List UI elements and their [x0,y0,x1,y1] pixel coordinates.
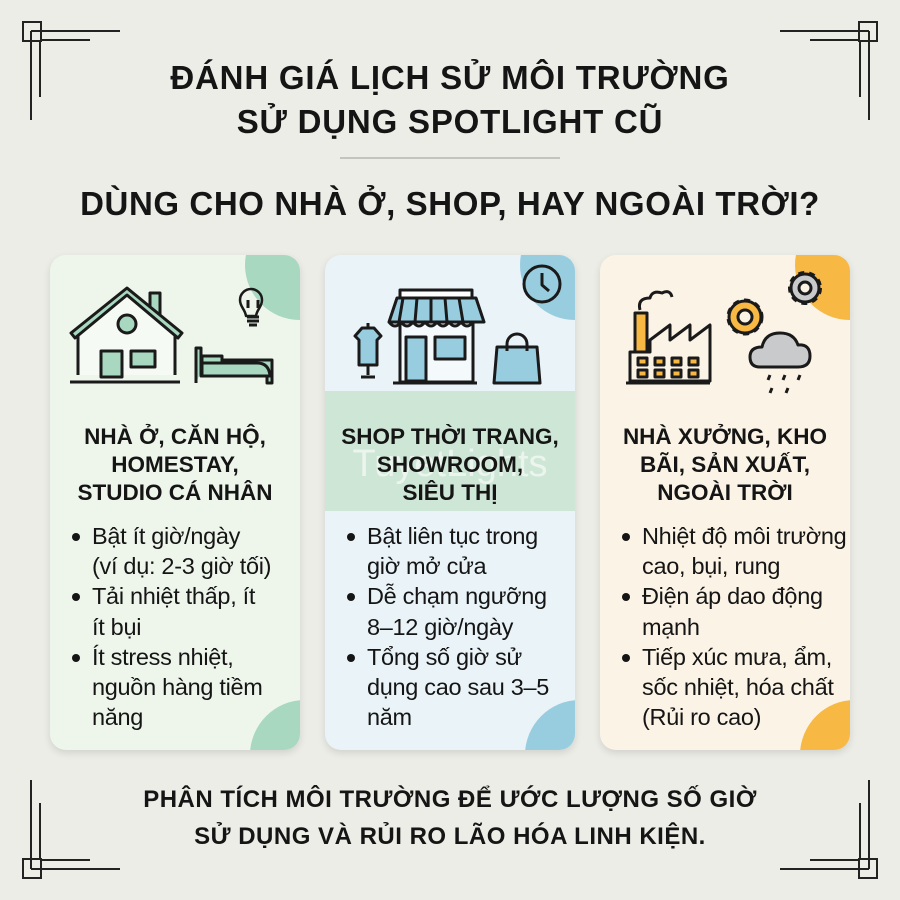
bullet list: nguồn hàng tiềm [92,674,263,700]
heading: NHÀ Ở, CĂN HỘ, [84,424,266,449]
bullet list [347,523,549,730]
footer [143,785,757,850]
bullet list: Bật ít giờ/ngày [92,523,240,549]
bullet list [72,523,271,730]
icon: factory, gears, rain cloud [626,271,822,394]
panel: industrial [600,255,850,750]
bullet list: giờ mở cửa [367,553,486,579]
icon: house, bed, bulb [69,286,274,384]
bullet list: cao, bụi, rung [642,553,780,579]
footer: SỬ DỤNG VÀ RỦI RO LÃO HÓA LINH KIỆN. [194,823,706,850]
bullet list: Nhiệt độ môi trường [642,523,846,549]
bullet list: mạnh [642,614,700,640]
heading: NGOÀI TRỜI [657,480,793,505]
bullet list: Tiếp xúc mưa, ẩm, [642,644,832,670]
bullet list: (Rủi ro cao) [642,704,761,730]
bullet list: Ít stress nhiệt, [92,644,233,670]
heading [623,424,827,505]
bullet list: Điện áp dao động [642,583,823,609]
heading: STUDIO CÁ NHÂN [78,480,272,505]
panel: residential [50,255,300,750]
bullet list: Tải nhiệt thấp, ít [92,583,255,609]
bullet list: sốc nhiệt, hóa chất [642,674,834,700]
heading: SHOWROOM, [377,452,523,477]
bullet list: (ví dụ: 2-3 giờ tối) [92,553,271,579]
subtitle: DÙNG CHO NHÀ Ở, SHOP, HAY NGOÀI TRỜI? [80,185,820,222]
heading: SIÊU THỊ [402,480,498,505]
heading: BÃI, SẢN XUẤT, [640,452,810,477]
icon: storefront, dress, bag, clock [353,264,562,384]
footer: PHÂN TÍCH MÔI TRƯỜNG ĐỂ ƯỚC LƯỢNG SỐ GIỜ [143,786,757,813]
panel: shop [325,255,575,750]
bullet list: 8–12 giờ/ngày [367,614,513,640]
heading: SHOP THỜI TRANG, [341,424,559,449]
bullet list: Bật liên tục trong [367,523,538,549]
title [170,59,730,140]
bullet list: ít bụi [92,614,141,640]
heading: HOMESTAY, [111,452,239,477]
bullet list [622,523,846,730]
bullet list: Tổng số giờ sử [367,644,522,670]
bullet list: năm [367,704,412,730]
panel: shop: TuyetLights [352,443,548,485]
watermark [320,391,578,511]
bullet list: Dễ chạm ngưỡng [367,583,547,609]
heading [78,424,272,505]
heading [341,424,559,505]
title: SỬ DỤNG SPOTLIGHT CŨ [237,103,663,140]
bullet list: dụng cao sau 3–5 [367,674,549,700]
title: ĐÁNH GIÁ LỊCH SỬ MÔI TRƯỜNG [170,59,730,96]
bullet list: năng [92,704,143,730]
heading: NHÀ XƯỞNG, KHO [623,424,827,449]
